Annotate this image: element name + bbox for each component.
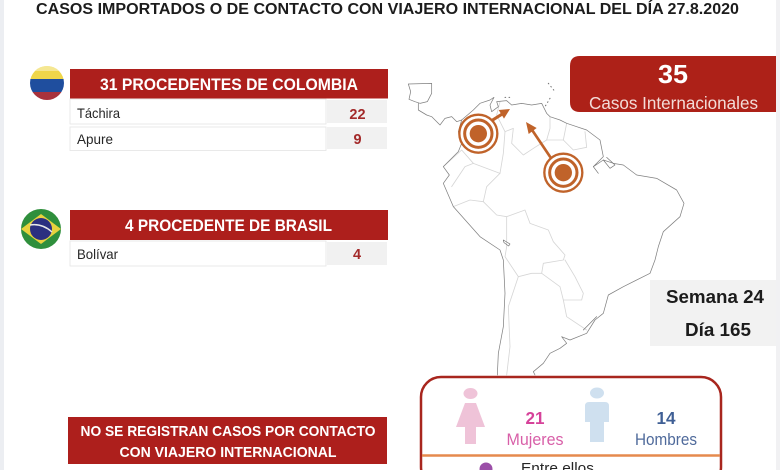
women count: Mujeres — [506, 431, 564, 449]
arrow: Brasil to Bolívar — [526, 122, 550, 157]
heading: Brasil — [70, 210, 388, 240]
row: Apure: 9 — [353, 132, 362, 148]
map: South America — [408, 83, 684, 375]
icon: target Colombia — [459, 115, 497, 153]
row: Táchira: Táchira — [77, 105, 120, 121]
women count: 21 — [526, 408, 545, 428]
row: Bolívar: 4 — [353, 247, 361, 263]
men count: 14 — [656, 408, 676, 428]
heading: Brasil: 4 PROCEDENTE DE BRASIL — [125, 217, 332, 235]
heading: Colombia: 31 PROCEDENTES DE COLOMBIA — [100, 76, 358, 94]
panel: Colombia — [30, 66, 388, 150]
row: Bolívar — [70, 241, 387, 266]
icon: child — [480, 462, 492, 470]
icon: Colombia flag — [30, 66, 64, 101]
heading: Colombia — [70, 69, 388, 98]
icon: target Brasil — [544, 154, 582, 192]
callout: no contact cases: CON VIAJERO INTERNACIONAL — [120, 444, 336, 461]
men count — [635, 408, 697, 449]
women count — [506, 408, 564, 449]
callout: no contact cases — [68, 417, 387, 464]
panel: sex breakdown — [421, 377, 721, 470]
row: Táchira: 22 — [349, 107, 366, 123]
panel: Brasil — [20, 208, 388, 266]
panel: total cases: 35 — [658, 59, 688, 89]
row: Táchira — [70, 99, 387, 124]
country borders — [443, 102, 587, 375]
callout: no contact cases: NO SE REGISTRAN CASOS POR CONTACTO — [80, 423, 376, 440]
panel: week and day: Semana 24 — [666, 286, 765, 307]
row: Apure: Apure — [77, 131, 113, 147]
row: Bolívar: Bolívar — [77, 246, 118, 262]
coastline — [408, 83, 462, 125]
icon: man — [585, 388, 609, 442]
arrow: Colombia to Táchira — [490, 109, 510, 122]
panel: week and day — [650, 280, 776, 346]
icon: Brazil flag — [20, 208, 62, 250]
panel: total cases — [570, 56, 776, 113]
title: CASOS IMPORTADOS O DE CONTACTO CON VIAJERO INTERNACIONAL DEL DÍA 27.8.2020 — [36, 0, 739, 18]
row: Apure — [70, 127, 387, 150]
panel: total cases: Casos Internacionales — [589, 93, 758, 113]
icon: woman — [456, 388, 485, 444]
panel: week and day: Día 165 — [685, 319, 751, 340]
men count: Hombres — [635, 431, 697, 449]
